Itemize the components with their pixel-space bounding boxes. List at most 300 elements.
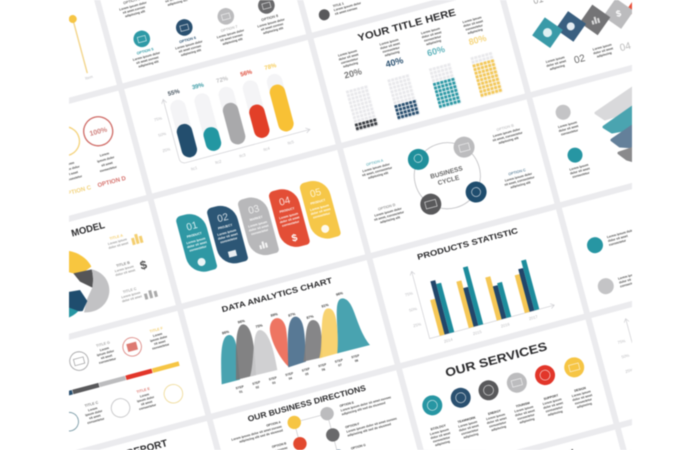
peak values: 89% [270, 312, 279, 318]
bars 2017 [511, 259, 539, 313]
banner 04: consectetur [282, 219, 300, 228]
step labels: STEP [301, 367, 310, 373]
option C text: Lorem ipsum dolor [504, 171, 533, 183]
service energy [476, 378, 509, 433]
icon: option 8 [256, 0, 277, 16]
panel: layers [532, 49, 700, 202]
column 60%: 60% [426, 44, 446, 58]
panel: our services [402, 320, 613, 450]
teal item text: dolor sit amet [570, 166, 590, 176]
service teamwork [448, 385, 481, 440]
column 20% [336, 48, 379, 131]
panel: our business directions [213, 370, 418, 450]
banner 01: Lorem ipsum [186, 236, 206, 245]
banner 03: 03 [247, 203, 261, 217]
column 20%: dolor sit amet [338, 52, 359, 62]
banner 05: 05 [309, 187, 323, 200]
service design: consectetur [574, 397, 593, 406]
chart axes [161, 65, 311, 167]
panel: venn model [0, 201, 176, 354]
service design: adipiscing [576, 401, 592, 409]
banner 04: Lorem ipsum [279, 211, 299, 220]
banner 04: dolor sit amet [279, 215, 300, 224]
column 20%: consectetur [341, 56, 359, 65]
y axis labels: 50% [409, 306, 418, 313]
option 2 text [160, 0, 192, 8]
gray item text: consectetur [561, 128, 579, 137]
step labels: 07 [338, 363, 342, 368]
y axis labels: 75% [617, 338, 626, 345]
title G text: TITLE G [96, 340, 111, 348]
title 1 text: Lorem ipsum dolor [333, 1, 362, 12]
title C text: Lorem [88, 406, 98, 412]
icon: bars [130, 233, 143, 245]
diamond red [626, 0, 657, 23]
title C text: TITLE C [122, 287, 137, 294]
bar 3: Itc3 [239, 152, 247, 159]
step labels [235, 353, 361, 395]
title 1 text: sit amet consec [334, 6, 358, 16]
service ecology: Lorem ipsum [429, 427, 450, 436]
x axis labels: 2016 [500, 321, 511, 329]
icon: chart red [121, 335, 144, 358]
segment dark gray [72, 383, 99, 394]
slider label: Item [85, 74, 94, 81]
column 60% [419, 26, 462, 109]
icon: dollar: $ [138, 257, 149, 273]
center label [430, 165, 466, 188]
step labels: 08 [354, 358, 359, 363]
center label: CYCLE [437, 174, 461, 187]
option C text: sit amet [66, 170, 78, 177]
banner 01 [175, 210, 218, 276]
option 6 text: OPTION 6 [179, 36, 196, 44]
icon: gray circle [554, 103, 572, 121]
bars 2014 [426, 279, 454, 336]
title C text: dolor sit amet [122, 294, 142, 303]
title B text [113, 260, 136, 277]
option C label: OPTION C [62, 185, 93, 198]
title F text [147, 326, 171, 351]
option C text: Lorem [65, 161, 75, 167]
title E text: Lorem [139, 392, 150, 398]
panel: partial chart [591, 269, 700, 422]
node red [292, 436, 308, 450]
icon: outline gray [109, 397, 132, 419]
gray item text [557, 120, 580, 137]
option A text: OPTION A [266, 420, 282, 428]
node dark [325, 427, 341, 443]
gray item text: consectetur [620, 280, 638, 288]
panel: timeline [0, 311, 205, 450]
option A text: OPTION A [366, 158, 384, 167]
service design [562, 355, 595, 410]
title: OUR BUSINESS DIRECTIONS [247, 383, 368, 424]
panel: side list [562, 159, 700, 312]
option 5 text: OPTION 5 [136, 47, 154, 56]
banner 02: dolor sit amet [217, 232, 238, 241]
banner 01: 01 [185, 220, 199, 233]
option 7 text: OPTION 7 [220, 25, 238, 33]
title 1 text [332, 0, 363, 16]
title F text: TITLE F [149, 326, 164, 334]
peak values: 91% [321, 303, 330, 309]
panel: title list [284, 0, 495, 33]
service tourism: consectetur [517, 412, 536, 421]
option D label: OPTION D [97, 176, 127, 189]
panel: model heading bottom [471, 430, 620, 450]
node navy [330, 448, 347, 450]
step labels: 03 [272, 380, 276, 385]
icon: bars [591, 16, 600, 25]
banner 03: Lorem ipsum [248, 220, 268, 229]
service energy: consectetur [489, 420, 507, 429]
step labels: 04 [288, 376, 293, 381]
option B text: adipiscing elit [498, 136, 519, 145]
service ecology: adipiscing [435, 439, 450, 447]
service design: Lorem ipsum [571, 389, 591, 398]
node gray [319, 405, 335, 422]
cycle ring [407, 135, 488, 216]
title: BUSINESS MODEL [21, 220, 106, 253]
icon: option 6 [174, 17, 194, 38]
teal item text [569, 163, 591, 179]
step labels: STEP [252, 380, 261, 386]
teal item text [606, 228, 637, 247]
banner 04: PRODUCT [279, 206, 295, 214]
bars 2016 [485, 274, 511, 321]
option 5 text [131, 46, 163, 70]
title G text: sit amet [100, 353, 113, 360]
title F text: sit amet [154, 339, 166, 346]
option F text: Lorem ipsum dolor sit amet consec [346, 416, 398, 434]
y axis labels: 25% [162, 146, 171, 153]
segment navy [46, 390, 73, 401]
item 02 text: adipiscing [596, 51, 612, 59]
banner 04: 04 [278, 195, 292, 209]
y axis labels: 50% [621, 352, 630, 359]
panel: business cycle [343, 99, 554, 253]
option B text: OPTION B [496, 124, 515, 132]
step labels: STEP [351, 353, 360, 359]
bar 3: 72% [216, 76, 229, 85]
panel: your title here [313, 0, 525, 143]
icon: outline yellow [162, 382, 185, 405]
option A text [230, 420, 284, 446]
icon: briefcase [451, 134, 477, 160]
peak values: 87% [288, 312, 297, 318]
option A text: Lorem ipsum dolor sit amet consec [231, 424, 283, 442]
bar 4: 56% [240, 69, 254, 78]
slider track [73, 19, 87, 73]
item 02 text: dolor sit amet [593, 46, 614, 55]
service ecology [420, 393, 453, 448]
option A text: Lorem ipsum dolor [362, 162, 391, 173]
banner 02: 02 [216, 212, 230, 225]
title A text [106, 233, 129, 250]
title: YOUR TITLE HERE [357, 7, 457, 44]
service ecology: dolor sit amet [430, 431, 451, 440]
title G text [94, 340, 117, 365]
step labels: 01 [239, 389, 243, 394]
y axis labels [404, 290, 422, 328]
option D text: sit amet, consectetur [374, 210, 405, 222]
option 7 text: adipiscing elit [222, 37, 243, 46]
option E text [339, 391, 393, 416]
teal item text: Lorem ipsum [569, 163, 589, 172]
number 02: 02 [573, 53, 587, 66]
segment red [125, 369, 153, 380]
diamond dark gray [580, 5, 610, 35]
icon: people [143, 289, 158, 300]
center label: BUSINESS [430, 165, 464, 181]
banner 01: consectetur [189, 244, 208, 253]
service tourism: adipiscing [519, 417, 535, 425]
teal item text: dolor sit amet [607, 234, 628, 243]
step labels: 02 [255, 385, 260, 390]
teal item text: consectetur [609, 238, 627, 247]
title: DATA ANALYTICS CHART [221, 276, 333, 314]
column 80%: 80% [468, 33, 487, 47]
option E text: adipiscing elit sed do eiusmod [341, 401, 386, 416]
segment yellow [152, 361, 180, 373]
title C text: TITLE C [84, 401, 99, 408]
diamond light gray [603, 0, 634, 29]
column 60%: consectetur [424, 34, 442, 43]
column 20%: 20% [343, 66, 363, 81]
title G text: Lorem [99, 346, 110, 352]
gray item text: Lorem ipsum [558, 120, 578, 129]
column 40% [377, 37, 420, 120]
service teamwork: Lorem ipsum [458, 420, 478, 429]
icon: teal cloud [585, 235, 605, 255]
panel: products statistic [373, 209, 584, 363]
panel: data analytics chart [183, 260, 395, 414]
peak values: 86% [222, 330, 230, 336]
banner 05: Lorem ipsum [310, 203, 330, 212]
option B text: OPTION B [271, 441, 288, 449]
chart: analytics humps [221, 298, 370, 384]
banner 02 [206, 202, 249, 267]
red ring 100% [80, 114, 116, 149]
y axis labels [154, 115, 171, 153]
icon: envelope [418, 191, 444, 217]
service tourism: dolor sit amet [515, 408, 535, 417]
icon: bulb [566, 22, 576, 31]
banner 03 [237, 194, 280, 259]
bar 1: Itc1 [190, 165, 199, 171]
title G text: consectetur [99, 356, 117, 365]
option A text [359, 157, 394, 181]
title F text: consectetur [152, 342, 170, 351]
title A text: TITLE A [109, 233, 124, 241]
icon: teal circle [566, 146, 584, 164]
service ecology: ECOLOGY [430, 423, 447, 431]
banner 05 [299, 177, 341, 243]
title E text: TITLE E [136, 387, 151, 394]
diamond teal [532, 17, 563, 48]
option F text: adipiscing elit sed do eiusmod [347, 422, 392, 438]
segment light gray [99, 376, 126, 387]
service design: dolor sit amet [572, 393, 593, 402]
option 8 text: Lorem ipsum dolor [257, 17, 286, 28]
service support [533, 363, 566, 418]
item 01 text: adipiscing [549, 63, 565, 71]
icon: bulb [406, 147, 431, 172]
option 1 text: adipiscing elit [125, 9, 146, 18]
column 20%: adipiscing [343, 61, 359, 69]
peak values: 96% [336, 291, 344, 297]
banner 02: Lorem ipsum [217, 228, 237, 237]
service design: DESIGN [574, 386, 587, 393]
title C text: ipsum dolor [85, 409, 104, 417]
step labels: STEP [334, 358, 343, 364]
bar 5 [263, 63, 299, 147]
option A text: sit amet, consectetur [362, 165, 393, 177]
peak values: 96% [237, 319, 246, 325]
option C text: adipiscing elit [510, 180, 531, 189]
chart: layered arrows [596, 87, 634, 161]
title A text: Lorem ipsum [107, 237, 128, 246]
title: OUR SERVICES [444, 339, 549, 380]
banner 01: PRODUCT [186, 231, 202, 239]
node yellow [286, 414, 302, 431]
service energy: dolor sit amet [486, 416, 507, 425]
bar 2 [190, 82, 227, 166]
gray item text: dolor sit amet [619, 275, 639, 285]
diamond navy [555, 11, 586, 42]
option F text: OPTION F [345, 422, 360, 429]
option C text: consectetur [65, 174, 83, 182]
icon: pie [542, 27, 553, 38]
option 7 text: sit amet consec [220, 33, 243, 43]
title E text: sit amet [140, 400, 153, 406]
x axis labels: 2017 [528, 314, 539, 321]
banner 02: PROJECT [218, 223, 233, 230]
peak values [220, 291, 348, 342]
panel: slider chart [0, 0, 117, 134]
option E text: OPTION E [339, 400, 354, 408]
y axis labels: 25% [413, 321, 422, 328]
x axis labels [443, 314, 539, 344]
gray item text: Lorem ipsum dolor [618, 269, 646, 281]
option C text: ipsum dolor [62, 164, 81, 173]
column 60%: dolor sit amet [421, 30, 442, 39]
banner 05: PRODUCT [310, 198, 326, 206]
option D text: adipiscing elit [380, 215, 401, 224]
option A text: adipiscing elit [368, 171, 389, 180]
column 40%: adipiscing [384, 50, 400, 57]
option D text: sit amet [101, 161, 113, 168]
title G text: ipsum dolor [96, 349, 115, 357]
y axis labels [617, 338, 634, 374]
icon: outline teal [58, 410, 81, 433]
option D text: Lorem [99, 151, 110, 158]
option E text: Lorem ipsum dolor sit amet consec [340, 395, 392, 412]
panel: bottom right slide [621, 379, 700, 450]
bar 5: Itc5 [287, 139, 295, 146]
option 8 text: sit amet consec [260, 22, 284, 32]
gray item text [618, 269, 649, 288]
panel: percentage rings [0, 91, 146, 244]
column 20%: Lorem ipsum [338, 49, 358, 58]
item 01 text [545, 55, 568, 72]
panel: options with icons [95, 0, 306, 83]
banner 05: consectetur [313, 211, 331, 220]
option F text [345, 412, 399, 438]
item 02 text [592, 42, 615, 59]
option B text: sit amet, consectetur [492, 130, 524, 142]
peak values: 87% [306, 314, 315, 320]
title B text: TITLE B [116, 261, 131, 268]
option 5 text: Lorem ipsum dolor [132, 50, 161, 62]
option A text: adipiscing elit sed do eiusmod [239, 428, 283, 444]
service support: dolor sit amet [543, 401, 563, 410]
title E text: consectetur [139, 402, 157, 411]
option 8 text [256, 12, 288, 36]
connectors [294, 414, 338, 450]
step labels: STEP [318, 362, 327, 368]
option D text [95, 150, 118, 173]
option 6 text: sit amet consec [178, 44, 202, 54]
option D text: ipsum dolor [97, 155, 116, 164]
title: PRODUCTS STATISTIC [416, 226, 519, 262]
chart: venn diagram [60, 251, 109, 319]
step labels: STEP [235, 384, 244, 390]
option 8 text: OPTION 8 [261, 14, 279, 22]
option 5 text: adipiscing elit [138, 59, 159, 69]
option C text: OPTION C [508, 168, 527, 177]
chart axes [409, 238, 555, 342]
bar 1 [166, 88, 202, 173]
option 1 text [118, 0, 150, 19]
x axis labels: 2015 [472, 329, 483, 336]
bar 2: Itc2 [214, 158, 223, 165]
banner 05: dolor sit amet [310, 207, 331, 216]
option 6 text [174, 34, 206, 58]
column 80%: dolor sit amet [463, 19, 483, 28]
option C text [502, 166, 537, 191]
banner 02: consectetur [220, 236, 239, 244]
option B text [490, 122, 525, 146]
option C text [61, 159, 83, 182]
banner 04: $ [291, 232, 299, 245]
title B text: dolor sit amet [115, 268, 136, 277]
panel: report heading [81, 421, 215, 450]
service teamwork: adipiscing [463, 432, 479, 440]
title C text: consectetur [87, 416, 106, 425]
bar 3 [214, 75, 251, 160]
panel: banners 01-05 [154, 150, 365, 304]
item 02 text: Lorem ipsum [592, 42, 612, 51]
service teamwork: TEAMWORK [457, 415, 477, 424]
service tourism [504, 370, 537, 425]
icon: gear [463, 179, 489, 205]
step labels: STEP [268, 376, 277, 382]
title F text: Lorem [153, 332, 163, 338]
title C text [119, 286, 142, 303]
service teamwork: dolor sit amet [458, 423, 479, 433]
column 60%: adipiscing [426, 38, 442, 46]
panel: bar chart [124, 40, 336, 193]
option D text: Lorem ipsum dolor [374, 206, 403, 218]
title C text: Lorem ipsum [121, 290, 141, 299]
icon: option 7 [216, 6, 236, 27]
column 40%: Lorem ipsum [379, 37, 399, 46]
chart axis [623, 318, 648, 394]
icon: pie [318, 8, 331, 22]
title C text: sit amet [89, 413, 101, 420]
